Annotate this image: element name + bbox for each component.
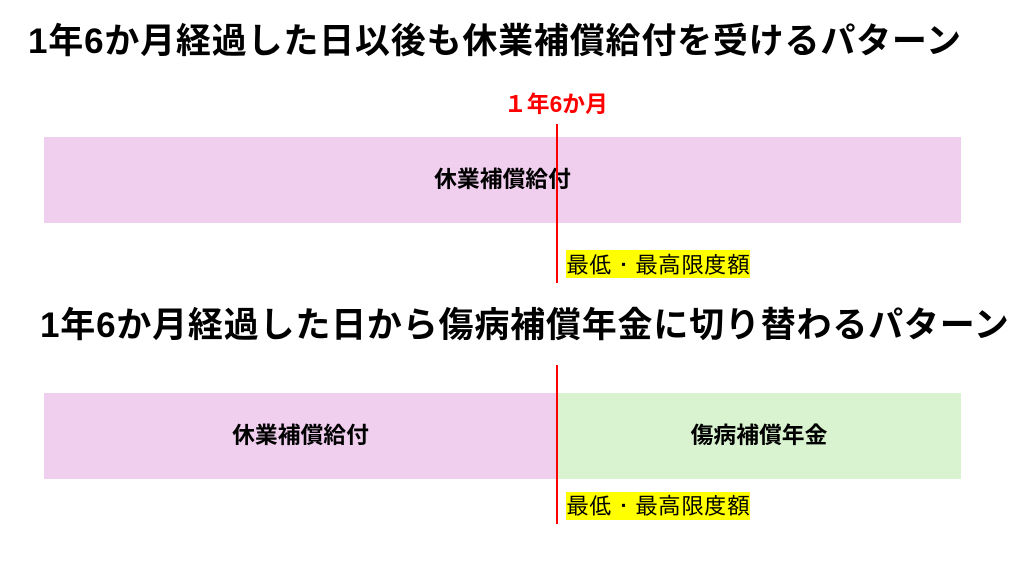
bar: temporary disability benefit — [44, 137, 961, 223]
title: pattern 1: 1年6か月経過した日以後も休業補償給付を受けるパターン — [28, 22, 962, 61]
title: pattern 2: 1年6か月経過した日から傷病補償年金に切り替わるパターン — [40, 306, 1010, 345]
highlighted note: pattern 2: 最低・最高限度額 — [566, 494, 750, 517]
label: 1 year 6 months: １年6か月 — [504, 91, 608, 117]
bar: temporary disability benefit before switch: 休業補償給付 — [232, 422, 369, 448]
bar: temporary disability benefit: 休業補償給付 — [434, 166, 571, 192]
bar: injury and disease compensation pension — [557, 393, 961, 479]
marker line: pattern 1 — [556, 124, 558, 283]
marker line: pattern 2 — [556, 365, 558, 524]
highlighted note: pattern 1: 最低・最高限度額 — [566, 253, 750, 276]
bar: temporary disability benefit before switch — [44, 393, 557, 479]
bar: injury and disease compensation pension: 傷病補償年金 — [691, 422, 827, 448]
